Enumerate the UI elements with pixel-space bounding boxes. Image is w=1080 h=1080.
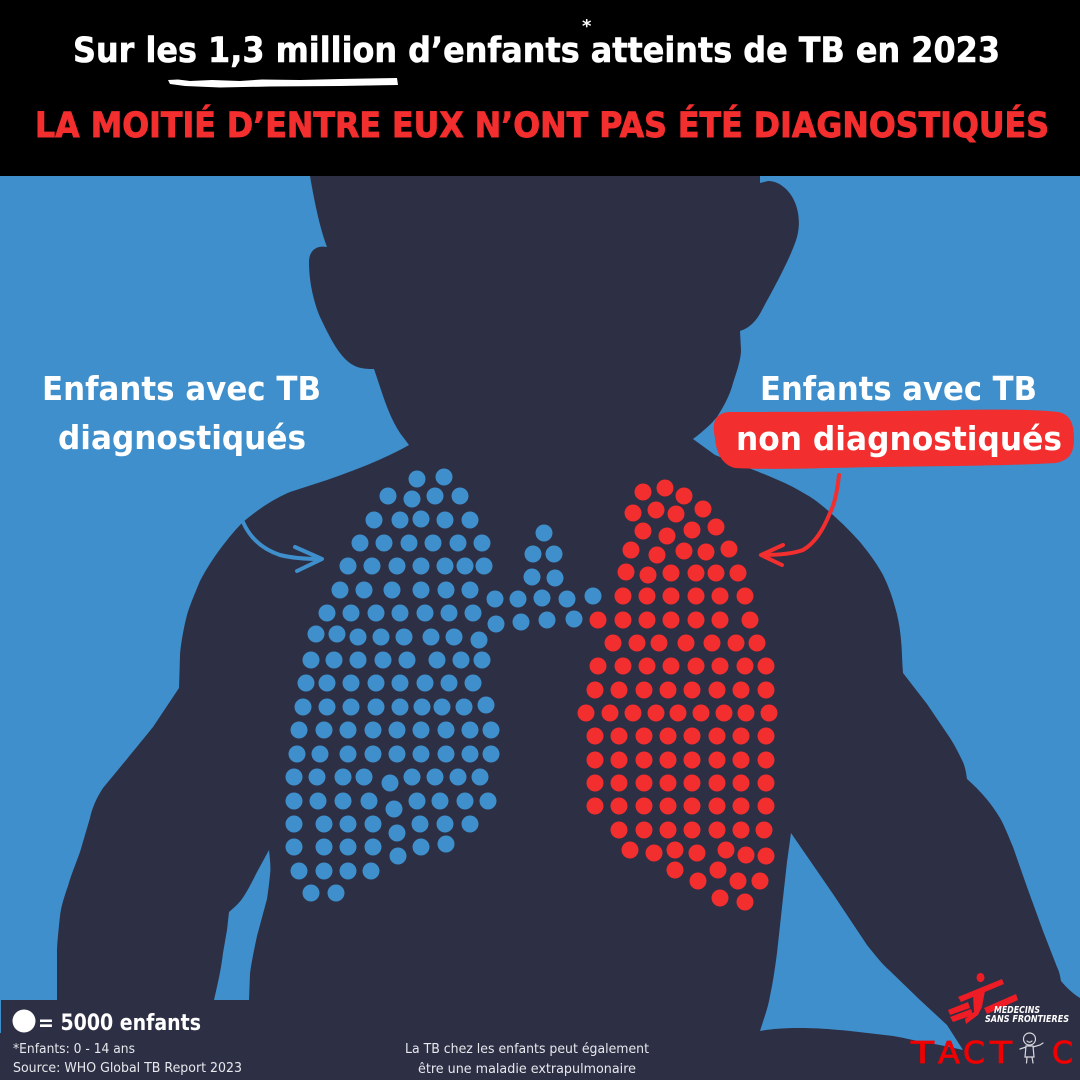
label: undiagnosed children: non diagnostiqués xyxy=(736,419,1062,458)
heading: first line: Sur les 1,3 million d’enfants atteints de TB en 2023 xyxy=(73,31,1000,71)
logo: TACTiC: T xyxy=(989,1036,1013,1071)
icon: stick-figure child xyxy=(1020,1033,1043,1063)
red highlight pill xyxy=(714,410,1074,469)
legend white dot xyxy=(12,1010,36,1032)
label: undiagnosed children xyxy=(714,369,1074,469)
brush underline xyxy=(168,78,398,88)
logo: TACTiC xyxy=(910,1033,1073,1071)
label: diagnosed children: diagnostiqués xyxy=(58,418,306,457)
logo wordmark: MEDECINS xyxy=(994,1005,1040,1016)
label: undiagnosed children: Enfants avec TB xyxy=(760,369,1037,408)
lung dots: undiagnosed (red) xyxy=(578,480,778,910)
extrapulmonary note: La TB chez les enfants peut également xyxy=(405,1041,649,1057)
arrow: red to right lung xyxy=(761,475,839,565)
logo: TACTiC: C xyxy=(963,1036,985,1071)
logo: Médecins Sans Frontières xyxy=(948,973,1069,1025)
label: diagnosed children xyxy=(42,369,321,457)
logo: TACTiC: A xyxy=(938,1036,961,1071)
lung dots: diagnosed (blue) xyxy=(286,468,602,902)
arrow: blue to left lung xyxy=(243,522,322,571)
running figure icon xyxy=(948,973,1018,1024)
extrapulmonary note: être une maladie extrapulmonaire xyxy=(418,1061,636,1077)
source footnote: Source: WHO Global TB Report 2023 xyxy=(13,1060,242,1076)
logo: TACTiC: C xyxy=(1052,1036,1073,1071)
age footnote: *Enfants: 0 - 14 ans xyxy=(13,1041,135,1057)
label: diagnosed children: Enfants avec TB xyxy=(42,369,321,408)
logo wordmark xyxy=(985,1005,1069,1025)
logo: TACTiC: T xyxy=(910,1036,935,1071)
legend and source note xyxy=(12,1010,242,1076)
legend text: = 5000 enfants xyxy=(38,1011,201,1036)
header band xyxy=(0,0,1080,176)
asterisk: * xyxy=(582,16,592,37)
extrapulmonary note xyxy=(405,1041,649,1077)
gap between torso and right arm xyxy=(760,833,963,1050)
